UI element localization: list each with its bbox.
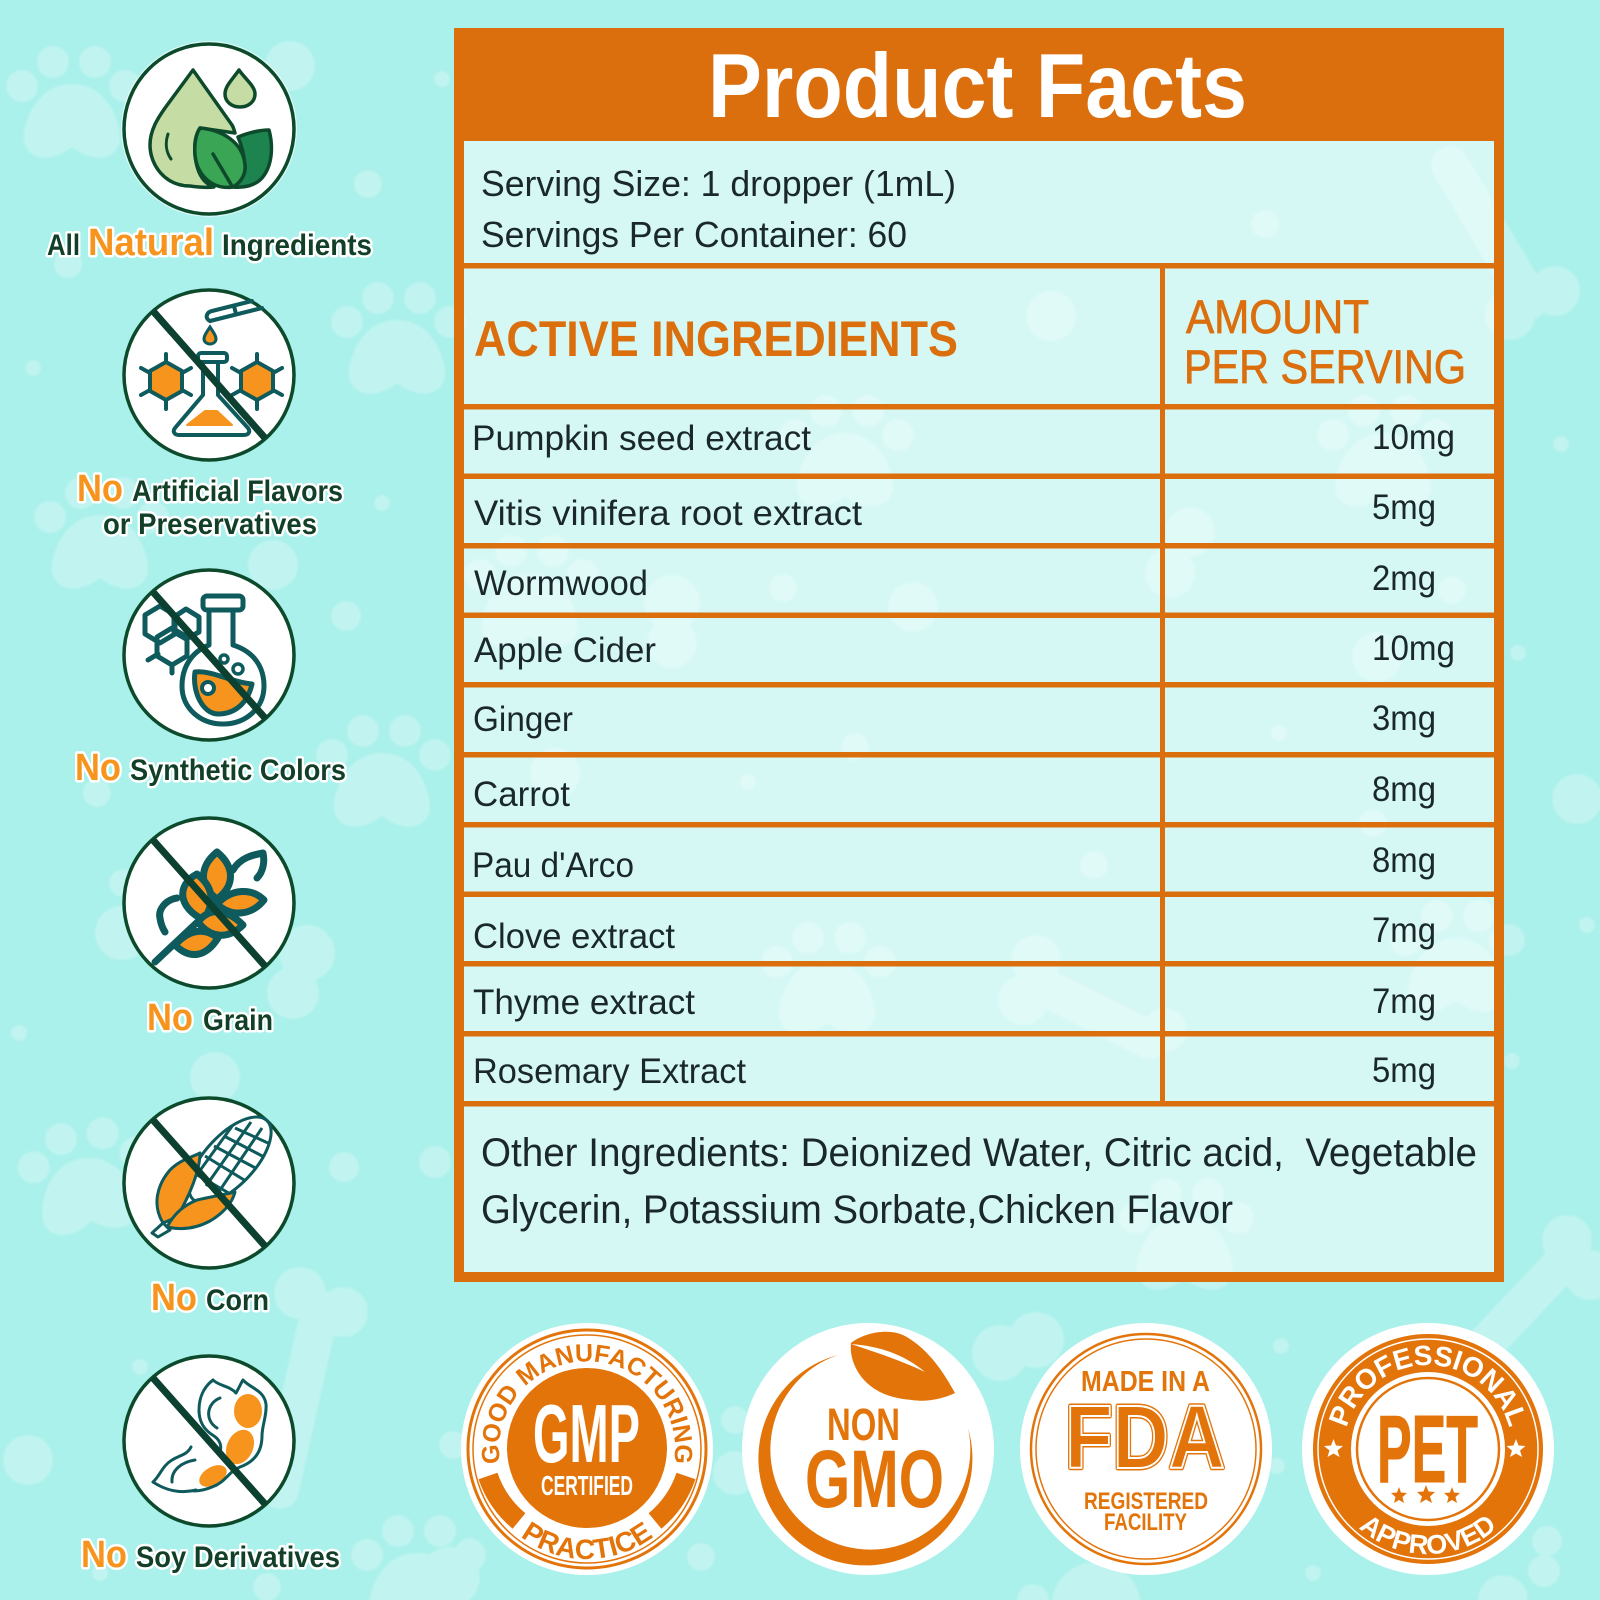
table frame — [454, 28, 1504, 1282]
column heading: active ingredients: ACTIVE INGREDIENTS — [474, 311, 958, 367]
label — [75, 747, 346, 789]
other ingredients — [481, 1131, 1477, 1232]
serving information: Serving Size: 1 dropper (1mL) — [481, 163, 956, 204]
crescent — [758, 1355, 972, 1565]
claim: all natural ingredients — [47, 41, 372, 264]
row: Ginger: Ginger — [473, 700, 573, 739]
row: Wormwood: Wormwood — [474, 564, 648, 603]
label: Natural — [88, 222, 214, 264]
other ingredients: Glycerin, Potassium Sorbate,Chicken Flavor — [481, 1188, 1233, 1232]
GMO text: GMO — [805, 1434, 944, 1525]
icon: crossed round flask — [124, 570, 294, 740]
claim: no artificial flavors or preservatives — [77, 290, 343, 541]
curved text: approved: APPROVED — [1359, 1517, 1494, 1554]
row: Pumpkin seed extract — [472, 418, 1455, 458]
row: Vitis vinifera root extract — [474, 488, 1436, 533]
icon: crossed wheat — [124, 818, 294, 988]
row: Carrot — [473, 770, 1436, 814]
claim: no soy derivatives — [81, 1356, 340, 1576]
label — [151, 1277, 269, 1319]
claim: no corn — [124, 1098, 294, 1319]
row: Clove extract: 7mg — [1372, 911, 1436, 950]
title: Product Facts — [708, 36, 1247, 137]
column heading: amount per serving: PER SERVING — [1184, 340, 1466, 393]
stars — [1324, 1439, 1526, 1503]
made in a: MADE IN A — [1081, 1366, 1210, 1398]
row: Apple Cider: Apple Cider — [474, 631, 656, 670]
row: Pumpkin seed extract: Pumpkin seed extract — [472, 419, 811, 458]
claim: no grain — [124, 818, 294, 1039]
label: No — [81, 1534, 127, 1576]
FDA logo: FDA — [1065, 1388, 1225, 1488]
badge: made in a FDA registered facility — [1020, 1323, 1272, 1575]
label: Grain — [203, 1004, 273, 1037]
GMP wordmark: GMP — [533, 1387, 640, 1480]
label: No — [77, 468, 123, 510]
label: Artificial Flavors — [132, 475, 343, 508]
row: Clove extract — [473, 911, 1436, 956]
leaf — [851, 1332, 955, 1401]
registered facility: REGISTERED — [1084, 1488, 1208, 1515]
badge: GMP certified — [461, 1323, 713, 1575]
row: Ginger: 3mg — [1372, 699, 1436, 738]
label — [77, 468, 343, 541]
label: No — [151, 1277, 197, 1319]
row: Pumpkin seed extract: 10mg — [1372, 418, 1455, 457]
row: Rosemary Extract — [473, 1051, 1436, 1091]
badge: professional pet approved — [1302, 1323, 1554, 1575]
label: No — [75, 747, 121, 789]
serving information: Servings Per Container: 60 — [481, 214, 907, 255]
column heading: amount per serving — [1184, 290, 1466, 393]
PET wordmark: PET — [1377, 1396, 1478, 1503]
row: Pau d'Arco — [472, 841, 1436, 885]
registered facility: FACILITY — [1104, 1509, 1187, 1536]
label: All — [47, 229, 80, 262]
table body tint — [464, 141, 1494, 1272]
label: Ingredients — [222, 229, 372, 262]
other ingredients: Other Ingredients: Deionized Water, Citric acid, Vegetable — [481, 1131, 1477, 1175]
label — [147, 997, 273, 1039]
row: Wormwood: 2mg — [1372, 559, 1436, 598]
label: Corn — [206, 1284, 269, 1317]
icon: oil drops and leaves — [121, 41, 297, 217]
row: Vitis vinifera root extract: Vitis vinifera root extract — [474, 494, 862, 533]
registered facility — [1084, 1488, 1208, 1536]
label: Synthetic Colors — [130, 754, 346, 787]
label — [47, 222, 372, 264]
serving information — [481, 163, 956, 255]
icon: crossed soybean pod — [124, 1356, 294, 1526]
row: Apple Cider — [474, 629, 1455, 670]
row: Vitis vinifera root extract: 5mg — [1372, 488, 1436, 527]
row: Thyme extract: Thyme extract — [473, 983, 695, 1022]
icon: crossed flask and molecules — [124, 290, 294, 460]
panel: product facts table — [454, 28, 1504, 1282]
row: Rosemary Extract: 5mg — [1372, 1051, 1436, 1090]
badge: non GMO — [742, 1323, 994, 1575]
curved text: good manufacturing: GOOD MANUFACTURING — [482, 1344, 692, 1463]
row: Thyme extract: 7mg — [1372, 982, 1436, 1021]
label: No — [147, 997, 193, 1039]
row: Ginger — [473, 699, 1436, 739]
label: Soy Derivatives — [136, 1541, 340, 1574]
claim: no synthetic colors — [75, 570, 346, 789]
row: Pau d'Arco: Pau d'Arco — [472, 846, 634, 885]
row: Clove extract: Clove extract — [473, 917, 675, 956]
row: Carrot: Carrot — [473, 775, 570, 814]
label: or Preservatives — [103, 508, 317, 541]
label — [81, 1534, 340, 1576]
row: Pau d'Arco: 8mg — [1372, 841, 1436, 880]
FDA logo: FDA — [1065, 1388, 1225, 1488]
NON text: NON — [827, 1399, 900, 1450]
curved text: professional: PROFESSIONAL — [1328, 1346, 1524, 1427]
certified: CERTIFIED — [541, 1470, 633, 1501]
curved text: practice: PRACTICE — [522, 1522, 653, 1560]
row: Rosemary Extract: Rosemary Extract — [473, 1052, 746, 1091]
row: Carrot: 8mg — [1372, 770, 1436, 809]
icon: crossed corn cob — [124, 1098, 294, 1268]
row: Wormwood — [474, 559, 1436, 603]
column heading: amount per serving: AMOUNT — [1186, 290, 1369, 343]
row: Thyme extract — [473, 982, 1436, 1022]
row: Apple Cider: 10mg — [1372, 629, 1455, 668]
